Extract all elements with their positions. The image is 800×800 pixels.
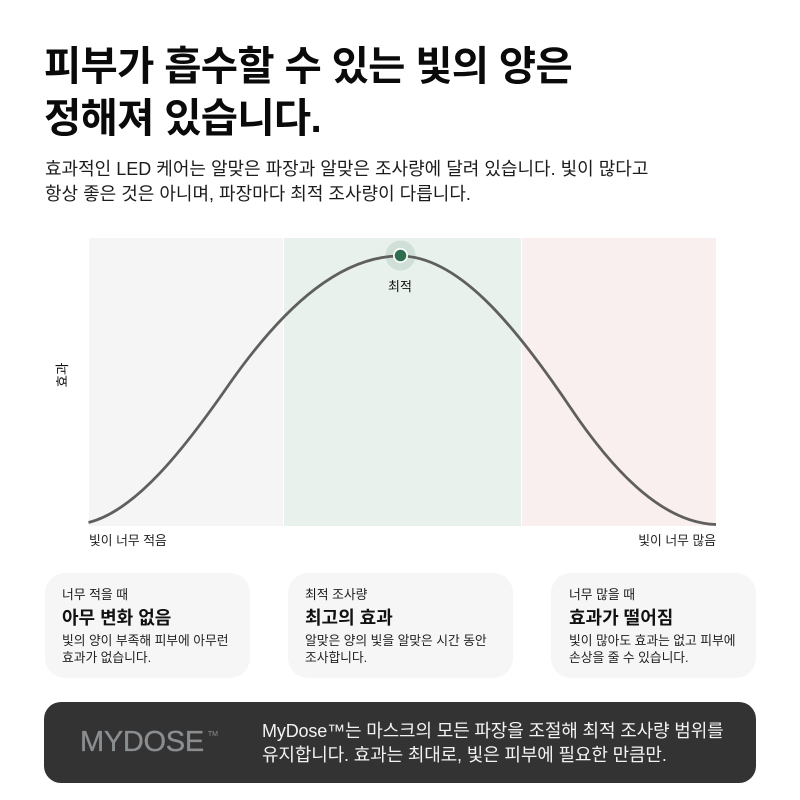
banner text: 유지합니다. 효과는 최대로, 빛은 피부에 필요한 만큼만.: [262, 745, 667, 765]
intro text: [45, 159, 648, 204]
card label: 너무 많을 때: [569, 587, 635, 602]
card label: 너무 적을 때: [62, 587, 128, 602]
intro text: 효과적인 LED 케어는 알맞은 파장과 알맞은 조사량에 달려 있습니다. 빛이 많다고: [45, 159, 648, 179]
peak label: 최적: [388, 279, 412, 294]
icon: optimal peak marker: [393, 248, 408, 263]
title: 피부가 흡수할 수 있는 빛의 양은: [44, 43, 572, 89]
icon: peak halo: [386, 240, 416, 270]
zone: optimal: [284, 238, 521, 526]
panel: optimal dose: [288, 573, 513, 678]
card body: 빛의 양이 부족해 피부에 아무런: [62, 633, 228, 648]
card heading: 효과가 떨어짐: [569, 608, 673, 628]
x axis label: low: 빛이 너무 적음: [89, 533, 167, 548]
panel: too much: [551, 573, 756, 678]
card body: [305, 633, 487, 664]
logo: MYDOSE: MYDOSE TM: [80, 726, 218, 758]
banner text: [262, 721, 724, 765]
banner: MyDose: [44, 702, 756, 783]
card body: 조사합니다.: [305, 650, 367, 664]
card body: 알맞은 양의 빛을 알맞은 시간 동안: [305, 633, 487, 648]
chart: dose response curve: [55, 238, 716, 548]
card body: 손상을 줄 수 있습니다.: [569, 650, 689, 664]
zone: too much light: [522, 238, 716, 526]
card body: [62, 633, 228, 664]
card body: [569, 633, 735, 664]
title: [44, 43, 572, 141]
banner text: MyDose™는 마스크의 모든 파장을 조절해 최적 조사량 범위를: [262, 721, 724, 741]
zone: too little light: [89, 238, 283, 526]
panel: too little: [45, 573, 250, 678]
card body: 효과가 없습니다.: [62, 650, 151, 664]
title: 정해져 있습니다.: [44, 95, 321, 141]
y axis label: 효과: [55, 363, 70, 387]
card heading: 최고의 효과: [305, 608, 393, 628]
card body: 빛이 많아도 효과는 없고 피부에: [569, 633, 735, 648]
x axis label: high: 빛이 너무 많음: [638, 533, 716, 548]
curve: [88, 256, 716, 524]
intro text: 항상 좋은 것은 아니며, 파장마다 최적 조사량이 다릅니다.: [45, 184, 471, 204]
card label: 최적 조사량: [305, 587, 367, 602]
card heading: 아무 변화 없음: [62, 608, 171, 628]
